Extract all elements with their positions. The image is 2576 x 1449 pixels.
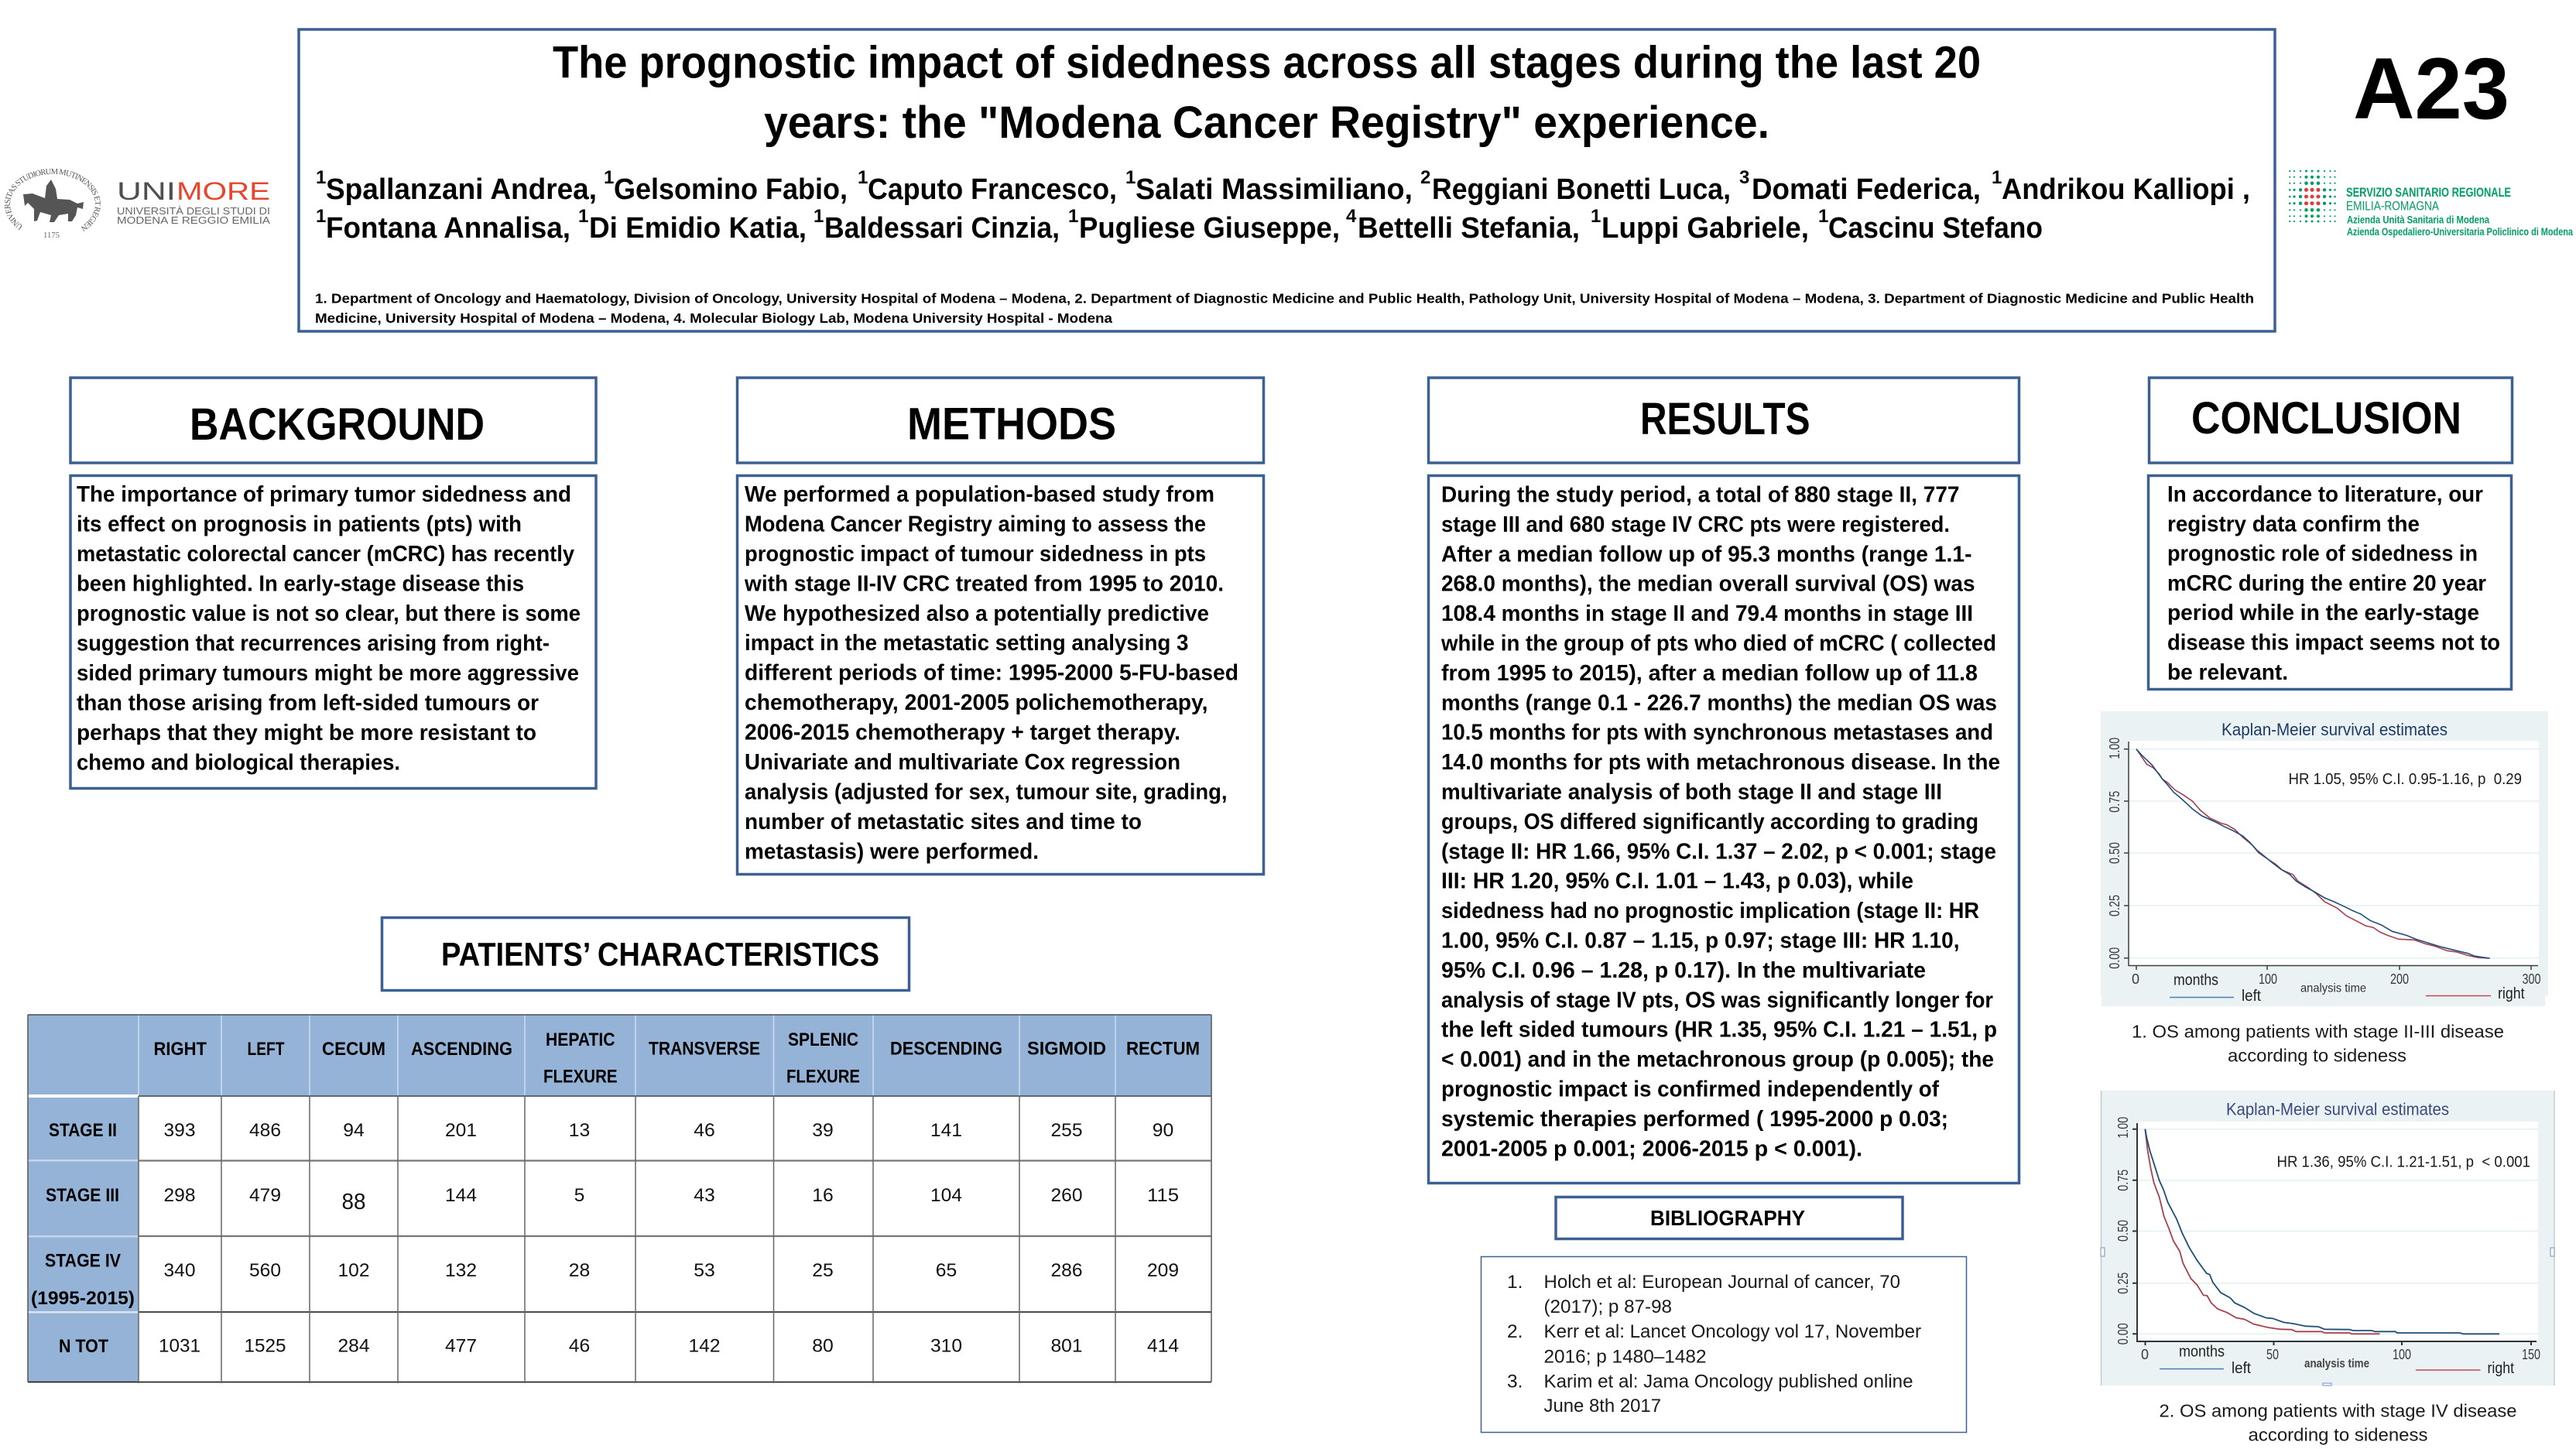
chart 2 axis labels: months — [2179, 1344, 2225, 1361]
icon: university seal: 1175 — [43, 231, 60, 240]
panel: results text: < 0.001) and in the metachronous group (p 0.005); the — [1441, 1047, 1994, 1072]
authors: Domati Federica, — [1752, 173, 1981, 206]
panel: background text: chemo and biological therapies. — [77, 751, 400, 776]
authors: Baldessari Cinzia, — [824, 212, 1060, 245]
chart 1 axis labels: 0.25 — [2107, 895, 2122, 916]
panel: results text: sidedness had no prognostic implication (stage II: HR — [1441, 899, 1979, 923]
poster code A23: A23 — [2353, 40, 2509, 137]
chart 2 hazard ratio note: HR 1.36, 95% C.I. 1.21-1.51, p < 0.001 — [2277, 1153, 2530, 1170]
panel: methods text: analysis (adjusted for sex, tumour site, grading, — [745, 780, 1228, 805]
table row: stage III: 260 — [1051, 1185, 1082, 1206]
panel: methods text — [737, 475, 1263, 875]
authors: Fontana Annalisa, — [326, 212, 570, 245]
table row: stage IV: 209 — [1147, 1260, 1179, 1281]
panel: results text: 95% C.I. 0.96 – 1.28, p 0.17). In the multivariate — [1441, 958, 1926, 983]
panel: bibliography list: June 8th 2017 — [1543, 1396, 1661, 1416]
authors: Pugliese Giuseppe, — [1079, 212, 1340, 245]
chart 2 axis labels — [2115, 1117, 2540, 1370]
caption: chart 2: 2. OS among patients with stage IV disease — [2160, 1401, 2517, 1421]
table row: N TOT: 310 — [930, 1336, 962, 1356]
panel: methods text: 2006-2015 chemotherapy + target therapy. — [745, 721, 1180, 745]
panel: methods text: different periods of time: 1995-2000 5-FU-based — [745, 661, 1238, 686]
title: years: the "Modena Cancer Registry" experience. — [764, 98, 1769, 148]
table row: N TOT: 801 — [1051, 1336, 1082, 1356]
table row: stage III: 5 — [574, 1185, 584, 1206]
panel: results text: months (range 0.1 - 226.7 months) the median OS was — [1441, 690, 1997, 715]
table row: stage III: 144 — [445, 1185, 477, 1206]
chart 1 axis labels: 0.00 — [2107, 947, 2122, 969]
title: The prognostic impact of sidedness across all stages during the last 20 — [553, 37, 1981, 88]
panel: background text: perhaps that they might be more resistant to — [77, 721, 536, 745]
panel: bibliography list: 2016; p 1480–1482 — [1543, 1347, 1706, 1367]
panel: results text: analysis of stage IV pts, OS was significantly longer for — [1441, 988, 1993, 1012]
panel: results heading — [1429, 378, 2019, 463]
panel: methods text: number of metastatic sites and time to — [745, 810, 1142, 834]
chart 1 axis labels: analysis time — [2300, 981, 2366, 995]
chart 1 legend — [2170, 985, 2525, 1005]
panel: methods text: We performed a population-based study from — [745, 482, 1214, 507]
heading: patients' characteristics — [382, 918, 909, 991]
table: patients' characteristics — [28, 1015, 1211, 1383]
table row headers — [31, 1120, 135, 1357]
panel: background text: been highlighted. In early-stage disease this — [77, 571, 524, 596]
health service name — [2346, 185, 2573, 238]
table row: N TOT: 142 — [689, 1336, 720, 1356]
panel: conclusion text: mCRC during the entire 20 year — [2167, 571, 2486, 596]
authors: Spallanzani Andrea, — [326, 173, 597, 206]
panel: results text: multivariate analysis of both stage II and stage III — [1441, 780, 1942, 805]
UNIMORE wordmark: MORE — [176, 177, 270, 205]
table row: N TOT: 477 — [445, 1336, 477, 1356]
table row: stage III — [164, 1185, 1179, 1214]
table column headers: FLEXURE — [543, 1067, 618, 1087]
authors: 1 — [1591, 206, 1601, 227]
panel: background heading: BACKGROUND — [190, 399, 485, 450]
table row: stage IV: 340 — [164, 1260, 195, 1281]
panel: results text: 10.5 months for pts with synchronous metastases and — [1441, 721, 1993, 745]
UNIMORE wordmark: MODENA E REGGIO EMILIA — [117, 214, 270, 226]
icon: dot grid — [2289, 170, 2336, 223]
chart 1 axis labels: 200 — [2390, 971, 2409, 987]
authors: 1 — [858, 167, 868, 188]
table row: stage III: 88 — [342, 1190, 365, 1214]
table row headers: STAGE IV — [45, 1251, 121, 1271]
panel: results text: groups, OS differed significantly according to grading — [1441, 810, 1978, 834]
chart 1 axis labels: 300 — [2522, 971, 2540, 987]
table row: stage II — [164, 1120, 1173, 1141]
chart 1 axis labels: 100 — [2259, 971, 2277, 987]
panel: bibliography list — [1482, 1257, 1966, 1432]
table row: stage III: 16 — [812, 1185, 834, 1206]
panel: conclusion text: disease this impact seems not to — [2167, 630, 2500, 655]
chart 1 survival curves — [2136, 749, 2490, 958]
heading: bibliography: BIBLIOGRAPHY — [1650, 1206, 1805, 1230]
chart 2 axis labels: 1.00 — [2115, 1117, 2131, 1139]
panel: background text: its effect on prognosis in patients (pts) with — [77, 512, 522, 537]
panel: results text: 2001-2005 p 0.001; 2006-2015 p < 0.001). — [1441, 1136, 1862, 1161]
authors: Caputo Francesco, — [868, 173, 1117, 206]
table column headers: ASCENDING — [411, 1039, 512, 1060]
authors: Gelsomino Fabio, — [614, 173, 848, 206]
caption: chart 2 — [2160, 1401, 2517, 1444]
authors: Reggiani Bonetti Luca, — [1432, 173, 1731, 206]
panel: background text: than those arising from left-sided tumours or — [77, 690, 539, 715]
chart 2 title: Kaplan-Meier survival estimates — [2226, 1099, 2449, 1119]
panel: conclusion text: registry data confirm the — [2167, 512, 2420, 536]
UNIMORE wordmark — [117, 177, 270, 226]
panel: results heading: RESULTS — [1640, 394, 1810, 444]
panel: header — [299, 29, 2275, 331]
table row: stage IV: 132 — [445, 1260, 477, 1281]
caption: chart 1: 1. OS among patients with stage II-III disease — [2132, 1022, 2504, 1042]
panel: conclusion text: be relevant. — [2167, 660, 2288, 685]
table column headers — [153, 1029, 1200, 1087]
authors: Andrikou Kalliopi , — [2002, 173, 2250, 206]
table row: stage IV: 28 — [569, 1260, 590, 1281]
table row: stage IV: 286 — [1051, 1260, 1082, 1281]
health service name: EMILIA-ROMAGNA — [2346, 198, 2440, 214]
panel: conclusion text — [2149, 475, 2511, 689]
panel: results text: During the study period, a total of 880 stage II, 777 — [1441, 483, 1960, 508]
chart 2 axis labels: 0.75 — [2115, 1170, 2131, 1191]
table row headers: N TOT — [59, 1336, 108, 1357]
logo: UNIMORE university — [5, 169, 270, 240]
table column headers: TRANSVERSE — [649, 1039, 760, 1059]
table row: N TOT: 1031 — [159, 1336, 200, 1356]
table row: stage IV — [164, 1260, 1179, 1281]
chart 2 survival curves — [2145, 1129, 2499, 1334]
panel: background text: prognostic value is not so clear, but there is some — [77, 601, 581, 626]
panel: conclusion text: prognostic role of sidedness in — [2167, 542, 2478, 567]
authors: 1 — [814, 206, 824, 227]
panel: methods text: Modena Cancer Registry aiming to assess the — [745, 512, 1206, 536]
health service name: Azienda Unità Sanitaria di Modena — [2347, 214, 2489, 226]
panel: results text: from 1995 to 2015), after a median follow up of 11.8 — [1441, 661, 1978, 686]
affiliations: Medicine, University Hospital of Modena – Modena, 4. Molecular Biology Lab, Modena University Hospital - Modena — [315, 310, 1112, 326]
panel: methods text: metastasis) were performed. — [745, 839, 1039, 864]
table row: stage IV: 65 — [936, 1260, 957, 1281]
panel: methods text: We hypothesized also a potentially predictive — [745, 601, 1209, 626]
icon: university seal — [5, 169, 101, 240]
panel: results text: systemic therapies performed ( 1995-2000 p 0.03; — [1441, 1107, 1948, 1132]
panel: bibliography list: 3. — [1507, 1372, 1523, 1392]
authors: Bettelli Stefania, — [1358, 212, 1580, 245]
table row: stage II: 39 — [812, 1120, 834, 1141]
authors: 1 — [1818, 206, 1828, 227]
table row headers: STAGE III — [46, 1185, 119, 1206]
table row: N TOT: 80 — [812, 1336, 834, 1356]
caption: chart 2: according to sideness — [2248, 1424, 2427, 1444]
panel: results text: 1.00, 95% C.I. 0.87 – 1.15, p 0.97; stage III: HR 1.10, — [1441, 929, 1960, 954]
chart 1 axis labels — [2107, 738, 2540, 995]
table row: N TOT: 46 — [569, 1336, 590, 1356]
chart 2 legend — [2160, 1360, 2514, 1377]
table column headers: RECTUM — [1126, 1039, 1200, 1059]
panel: results text: After a median follow up of 95.3 months (range 1.1- — [1441, 542, 1972, 567]
table column headers: HEPATIC — [546, 1029, 615, 1050]
table column headers: LEFT — [248, 1039, 285, 1060]
table header fills — [28, 1015, 1211, 1382]
chart 1: Kaplan-Meier stage II-III — [2101, 711, 2548, 1006]
table row: stage II: 141 — [930, 1120, 962, 1141]
chart 2 axis labels: 0.50 — [2115, 1220, 2131, 1242]
chart 1 hazard ratio note: HR 1.05, 95% C.I. 0.95-1.16, p 0.29 — [2288, 770, 2522, 788]
table row: stage IV: 102 — [337, 1260, 370, 1281]
table column headers: SIGMOID — [1027, 1039, 1106, 1059]
table row headers: STAGE II — [49, 1120, 117, 1141]
panel: bibliography list: Karim et al: Jama Oncology published online — [1543, 1372, 1913, 1392]
panel: results text: while in the group of pts who died of mCRC ( collected — [1440, 632, 1996, 656]
table row: stage III: 43 — [694, 1185, 715, 1206]
table row: N TOT: 1525 — [245, 1336, 286, 1356]
table column headers: RIGHT — [153, 1039, 207, 1060]
UNIMORE wordmark: UNI — [117, 177, 176, 205]
panel: methods text: prognostic impact of tumour sidedness in pts — [745, 542, 1206, 567]
panel: background text: suggestion that recurrences arising from right- — [77, 632, 550, 656]
selection handles — [2101, 1248, 2554, 1386]
table row: N TOT — [159, 1336, 1179, 1356]
table column headers: SPLENIC — [788, 1029, 858, 1050]
authors: 1 — [1068, 206, 1078, 227]
table row: stage II: 94 — [343, 1120, 365, 1141]
table row: stage IV: 53 — [694, 1260, 715, 1281]
table row: stage III: 115 — [1147, 1185, 1179, 1206]
heading: bibliography — [1556, 1197, 1903, 1238]
table column headers: FLEXURE — [786, 1067, 860, 1087]
chart 2 axis labels: 0.25 — [2115, 1273, 2131, 1294]
chart 1 axis labels: 1.00 — [2107, 738, 2122, 759]
panel: bibliography list: Kerr et al: Lancet Oncology vol 17, November — [1543, 1321, 1921, 1342]
panel: methods text: chemotherapy, 2001-2005 polichemotherapy, — [745, 690, 1208, 715]
logo: Servizio Sanitario Regionale — [2289, 170, 2573, 238]
authors: 4 — [1346, 206, 1357, 227]
authors — [316, 167, 2250, 245]
heading: patients' characteristics: PATIENTS’ CHARACTERISTICS — [441, 937, 879, 974]
table row: stage II: 90 — [1153, 1120, 1173, 1141]
panel: results text: (stage II: HR 1.66, 95% C.I. 1.37 – 2.02, p < 0.001; stage — [1441, 839, 1996, 864]
chart 2 legend: right — [2488, 1360, 2514, 1377]
table row: stage II: 13 — [569, 1120, 590, 1141]
panel: background text: The importance of primary tumor sidedness and — [77, 482, 571, 507]
panel: bibliography list: (2017); p 87-98 — [1543, 1297, 1672, 1317]
authors: 1 — [316, 167, 326, 188]
chart 2 axis labels: 50 — [2266, 1347, 2279, 1362]
table column headers: DESCENDING — [890, 1039, 1002, 1059]
panel: methods text: Univariate and multivariate Cox regression — [745, 750, 1180, 775]
panel: results text: III: HR 1.20, 95% C.I. 1.01 – 1.43, p 0.03), while — [1441, 869, 1913, 894]
affiliations: 1. Department of Oncology and Haematology, Division of Oncology, University Hospital of Modena – Modena, 2. Department of Diagnostic Medicine and Public Health, Pathology Unit, University Hospital of Modena – Modena, 3. Department of Diagnostic Medicine and Public Health — [315, 291, 2254, 307]
panel: results text: 14.0 months for pts with metachronous disease. In the — [1441, 750, 2000, 775]
panel: conclusion heading: CONCLUSION — [2191, 393, 2461, 444]
chart 2 legend: left — [2232, 1360, 2251, 1377]
authors: 1 — [316, 206, 326, 227]
authors: 2 — [1420, 167, 1430, 188]
panel: results text: stage III and 680 stage IV CRC pts were registered. — [1441, 512, 1950, 537]
panel: background heading — [70, 378, 596, 463]
caption: chart 1 — [2132, 1022, 2504, 1065]
table row: stage III: 298 — [164, 1185, 195, 1206]
panel: methods heading: METHODS — [907, 399, 1116, 449]
health service name: SERVIZIO SANITARIO REGIONALE — [2346, 185, 2511, 200]
affiliations — [315, 291, 2254, 326]
authors: 3 — [1739, 167, 1749, 188]
table row: stage II: 255 — [1051, 1120, 1082, 1141]
chart 2: Kaplan-Meier stage IV — [2101, 1091, 2554, 1386]
table row: N TOT: 414 — [1147, 1336, 1179, 1356]
panel: results text: 268.0 months), the median overall survival (OS) was — [1441, 572, 1975, 597]
table row: stage IV: 560 — [249, 1260, 281, 1281]
panel: background text — [70, 475, 596, 788]
table row: stage II: 46 — [694, 1120, 715, 1141]
authors: 1 — [1992, 167, 2002, 188]
authors: Cascinu Stefano — [1828, 212, 2043, 245]
table row headers: (1995-2015) — [31, 1288, 135, 1309]
chart 1 legend: left — [2242, 988, 2261, 1005]
table row: stage II: 201 — [445, 1120, 477, 1141]
chart 2 axis labels: 150 — [2522, 1347, 2540, 1362]
panel: methods text: with stage II-IV CRC treated from 1995 to 2010. — [744, 571, 1224, 596]
panel: conclusion text: period while in the early-stage — [2167, 601, 2479, 625]
panel: bibliography list: 2. — [1507, 1321, 1523, 1342]
panel: bibliography list: Holch et al: European Journal of cancer, 70 — [1543, 1272, 1900, 1293]
panel: results text — [1429, 475, 2019, 1183]
chart 2 axis labels: 0 — [2141, 1347, 2149, 1362]
panel: results text: 108.4 months in stage II and 79.4 months in stage III — [1441, 601, 1973, 626]
chart 1 legend: right — [2498, 985, 2525, 1002]
table row: stage II: 393 — [164, 1120, 195, 1141]
panel: results text: the left sided tumours (HR 1.35, 95% C.I. 1.21 – 1.51, p — [1441, 1018, 1997, 1043]
panel: methods heading — [737, 378, 1263, 463]
panel: conclusion heading — [2149, 378, 2513, 463]
panel: methods text: impact in the metastatic setting analysing 3 — [745, 631, 1189, 656]
panel: background text: metastatic colorectal cancer (mCRC) has recently — [77, 542, 574, 567]
caption: chart 1: according to sideness — [2228, 1045, 2406, 1065]
authors: Luppi Gabriele, — [1601, 212, 1809, 245]
panel: background text: sided primary tumours might be more aggressive — [77, 661, 579, 686]
authors: Salati Massimiliano, — [1136, 173, 1413, 206]
table row: stage IV: 25 — [812, 1260, 834, 1281]
authors: Di Emidio Katia, — [589, 212, 807, 245]
table row: N TOT: 284 — [337, 1336, 370, 1356]
table row: stage III: 104 — [930, 1185, 962, 1206]
chart 2 axis labels: analysis time — [2304, 1358, 2369, 1370]
chart 1 axis labels: 0.75 — [2107, 791, 2122, 813]
chart 2 axis labels: 100 — [2393, 1347, 2411, 1362]
table row: stage II: 486 — [249, 1120, 281, 1141]
UNIMORE wordmark: UNIVERSITÀ DEGLI STUDI DI — [117, 205, 270, 217]
chart 1 title: Kaplan-Meier survival estimates — [2221, 720, 2448, 739]
chart 2 axis labels: 0.00 — [2115, 1323, 2131, 1345]
chart 1 axis labels: months — [2174, 972, 2218, 989]
authors: 1 — [1125, 167, 1136, 188]
authors: 1 — [604, 167, 614, 188]
panel: conclusion text: In accordance to literature, our — [2167, 482, 2483, 507]
chart 1 axis labels: 0.50 — [2107, 842, 2122, 864]
panel: results text: prognostic impact is confirmed independently of — [1441, 1077, 1939, 1102]
table column headers: CECUM — [322, 1039, 385, 1060]
authors: 1 — [578, 206, 588, 227]
table row: stage III: 479 — [249, 1185, 281, 1206]
chart 1 axis labels: 0 — [2132, 971, 2139, 987]
title — [553, 37, 1981, 148]
panel: bibliography list: 1. — [1507, 1272, 1523, 1293]
